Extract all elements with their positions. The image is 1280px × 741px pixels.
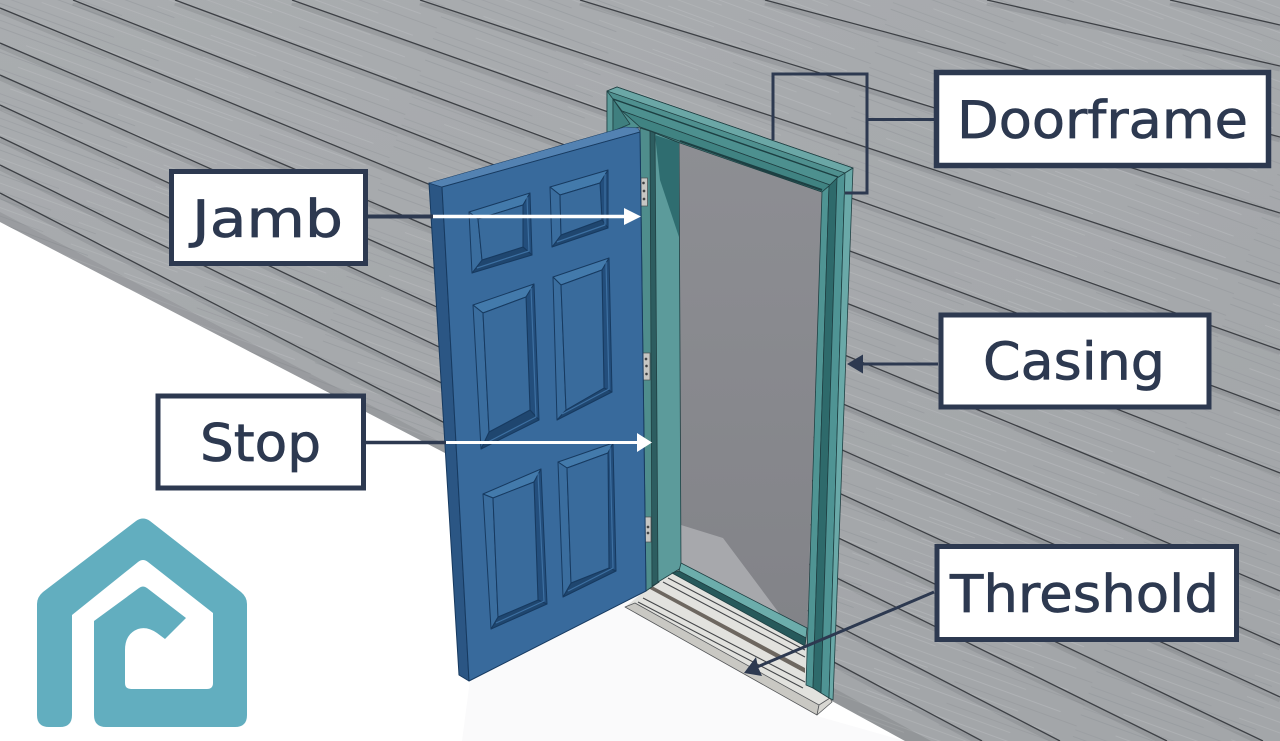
threshold	[625, 572, 832, 715]
frame: head casing	[607, 87, 853, 192]
label: doorframe: Doorframe	[957, 91, 1248, 151]
frame: hinge-side strip and jamb	[640, 128, 681, 591]
doorframe bracket	[773, 74, 934, 193]
doorframe	[607, 87, 853, 700]
label: casing: Casing	[983, 332, 1165, 392]
label: doorframe	[936, 72, 1268, 166]
label: jamb: Jamb	[189, 190, 343, 250]
door panel middle left	[473, 284, 539, 449]
door opening back wall	[679, 143, 822, 632]
door panel bottom left	[483, 469, 547, 629]
icon: house logo	[37, 518, 247, 727]
label: stop	[158, 396, 364, 488]
door panel top right	[550, 170, 608, 247]
door faces	[429, 127, 646, 681]
door panel top left	[469, 193, 532, 273]
label: jamb	[172, 172, 366, 264]
label: threshold: Threshold	[949, 565, 1219, 625]
door panel middle right	[553, 258, 612, 420]
label: casing	[941, 315, 1209, 407]
frame: sill strips	[672, 563, 807, 646]
door panel bottom right	[558, 443, 616, 597]
frame: right casing	[806, 168, 853, 700]
hinges	[641, 178, 651, 542]
label: stop: Stop	[200, 414, 321, 474]
arrow: casing	[847, 354, 938, 374]
label: threshold	[937, 546, 1236, 640]
door	[429, 127, 646, 681]
arrow: stop	[366, 433, 652, 452]
arrow: jamb	[368, 208, 641, 225]
floor shading near the door	[462, 592, 905, 741]
arrow: threshold	[744, 592, 934, 676]
